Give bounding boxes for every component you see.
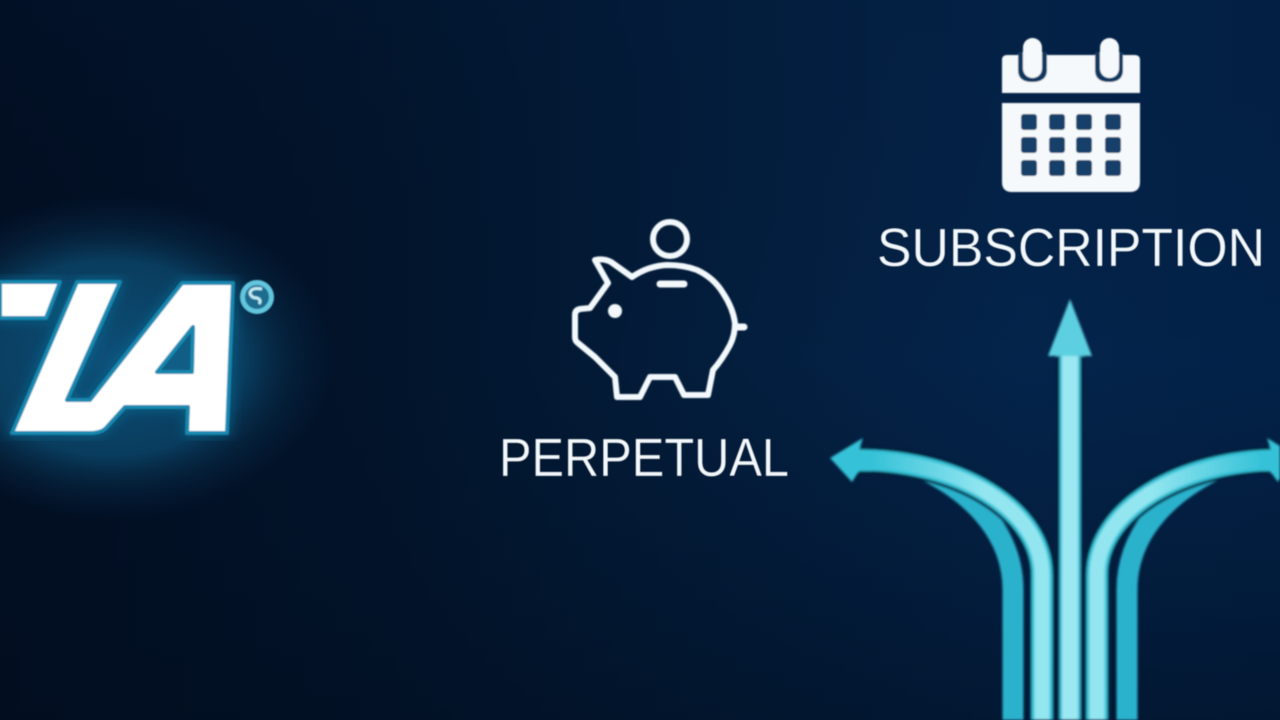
coin slot xyxy=(660,280,684,288)
subscription option xyxy=(877,38,1265,278)
left arrow back strand xyxy=(925,470,1013,720)
letter T fragment xyxy=(0,282,60,318)
icon: piggy bank with coin xyxy=(575,222,744,397)
registered mark xyxy=(242,282,272,312)
logo glow xyxy=(0,282,233,433)
calendar header xyxy=(1002,55,1140,93)
coin xyxy=(653,222,687,256)
pig body xyxy=(575,259,735,397)
calendar rings xyxy=(1018,38,1123,82)
right arrow back strand xyxy=(1127,470,1215,720)
icon: calendar xyxy=(1002,38,1140,192)
pig eye xyxy=(608,304,622,318)
perpetual option xyxy=(499,222,789,488)
calendar date grid xyxy=(1021,114,1121,176)
three diverging arrows xyxy=(830,299,1280,720)
left arrow front xyxy=(830,438,1042,720)
letters I and A xyxy=(12,282,233,433)
center arrow xyxy=(1048,299,1092,720)
pig tail xyxy=(736,324,744,330)
label: perpetual: PERPETUAL xyxy=(499,428,789,488)
label: subscription: SUBSCRIPTION xyxy=(877,218,1265,278)
right arrow front xyxy=(1097,438,1280,720)
calendar body xyxy=(1002,103,1140,192)
logo: cropped TIA wordmark xyxy=(0,282,272,433)
